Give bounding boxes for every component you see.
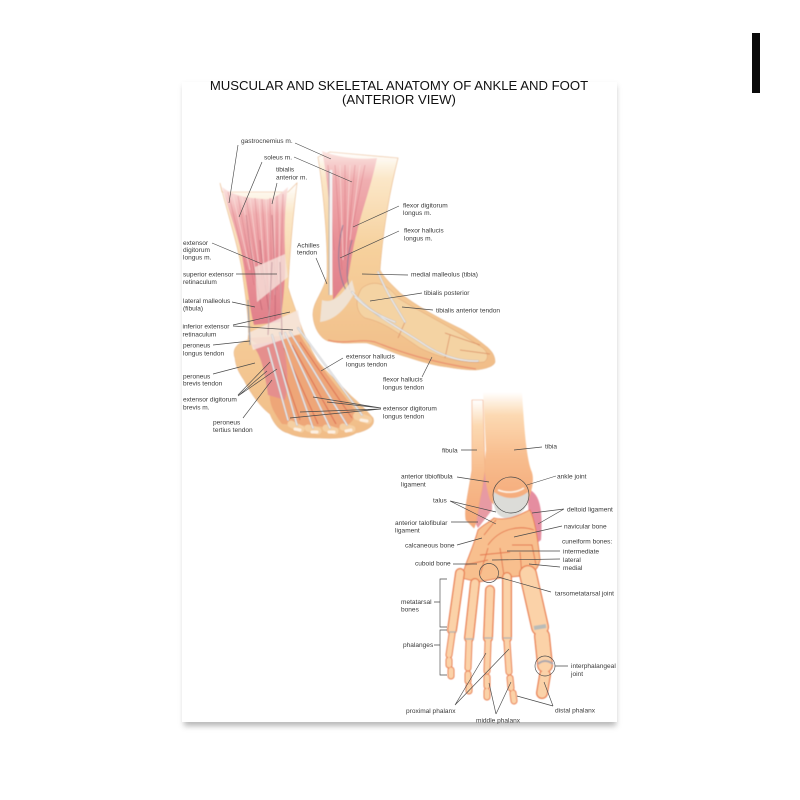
labels: side view: longus m.: [403, 210, 432, 217]
labels: front view: peroneus: [183, 342, 211, 350]
labels: side view: tibialis anterior tendon: [436, 308, 500, 314]
tibia: [483, 392, 533, 509]
labels: front view: peroneus: [213, 420, 241, 426]
ligaments: [468, 468, 492, 528]
labels: front view: [182, 138, 307, 434]
labels: front view: retinaculum: [182, 332, 217, 338]
labels: front view: superior extensor: [183, 272, 234, 278]
illustration: side view foot muscles: [313, 151, 495, 370]
labels: skeleton: talus: [433, 498, 448, 504]
labels: side view: extensor hallucis: [346, 354, 395, 360]
labels: front view: gastrocnemius m.: [241, 138, 293, 145]
labels: side view: Achilles: [297, 242, 320, 250]
talus: [493, 492, 528, 518]
heel fascia: [320, 280, 355, 322]
labels: side view: medial malleolus (tibia): [411, 272, 478, 278]
labels: skeleton: anterior tibiofibula: [401, 474, 453, 480]
labels: side view: longus tendon: [383, 384, 424, 392]
labels: front view: extensor digitorum: [183, 396, 237, 404]
metatarsals and phalanges outline: [449, 573, 545, 701]
labels: skeleton: interphalangeal: [571, 663, 616, 670]
poster shadow: [184, 86, 616, 726]
labels: side view: extensor digitorum: [383, 406, 437, 412]
labels: side view: flexor digitorum: [403, 202, 448, 210]
labels: side view: longus tendon: [383, 414, 424, 420]
labels: skeleton: fibula: [442, 448, 458, 454]
labels: front view: inferior extensor: [182, 324, 230, 330]
labels: front view: peroneus: [183, 374, 211, 380]
labels: skeleton: proximal phalanx: [406, 708, 456, 715]
labels: skeleton: medial: [563, 565, 583, 572]
labels: side view: [297, 202, 500, 420]
labels: skeleton: ligament: [401, 482, 426, 488]
poster sheet: [182, 82, 617, 722]
labels: skeleton: ankle joint: [557, 474, 587, 480]
labels: front view: longus tendon: [183, 350, 224, 358]
toes: [291, 424, 352, 431]
tarsal bones: [462, 510, 540, 582]
labels: skeleton: ligament: [395, 528, 420, 534]
labels: front view: brevis m.: [183, 404, 210, 412]
labels: skeleton: calcaneous bone: [405, 542, 455, 550]
title: (ANTERIOR VIEW): [342, 92, 456, 107]
labels: skeleton: lateral: [563, 557, 581, 564]
labels: skeleton: navicular bone: [564, 524, 607, 530]
labels: side view: flexor hallucis: [383, 376, 423, 384]
labels: skeleton: deltoid ligament: [567, 506, 613, 514]
fibula: [465, 400, 485, 528]
labels: front view: tertius tendon: [213, 427, 253, 434]
labels: front view: tibialis: [276, 166, 295, 174]
illustration: foot skeleton: [449, 392, 553, 701]
labels: front view: (fibula): [183, 306, 203, 312]
labels: skeleton: tarsometatarsal joint: [555, 590, 614, 598]
labels: front view: longus m.: [183, 254, 212, 262]
labels: side view: flexor hallucis: [404, 228, 444, 234]
labels: skeleton: joint: [570, 671, 583, 678]
labels: skeleton: tibia: [545, 444, 557, 450]
labels: front view: anterior m.: [276, 174, 307, 182]
labels: skeleton: metatarsal: [401, 599, 432, 606]
labels: front view: digitorum: [183, 247, 210, 254]
labels: skeleton: [395, 444, 616, 724]
labels: skeleton: phalanges: [403, 642, 434, 649]
labels: skeleton: cuneiform bones:: [562, 538, 612, 546]
labels: front view: retinaculum: [183, 279, 217, 286]
labels: side view: longus m.: [404, 236, 433, 242]
labels: front view: brevis tendon: [183, 380, 223, 388]
title: MUSCULAR AND SKELETAL ANATOMY OF ANKLE AND FOOT: [210, 78, 588, 93]
foot bones: [357, 283, 487, 362]
labels: side view: longus tendon: [346, 362, 387, 368]
leader lines: [212, 143, 568, 714]
illustration: front view foot muscles: [220, 183, 374, 438]
labels: front view: lateral malleolus: [183, 298, 231, 305]
labels: skeleton: distal phalanx: [555, 708, 596, 714]
labels: skeleton: middle phalanx: [476, 718, 521, 724]
black bar: [752, 33, 760, 93]
labels: front view: soleus m.: [264, 154, 292, 162]
labels: front view: extensor: [183, 240, 209, 247]
labels: skeleton: bones: [401, 606, 420, 614]
labels: skeleton: intermediate: [563, 548, 599, 556]
title: [210, 78, 588, 107]
retinacula: [255, 254, 288, 302]
tendons: [268, 328, 362, 428]
labels: side view: tendon: [297, 250, 317, 256]
labels: skeleton: cuboid bone: [415, 560, 451, 568]
labels: side view: tibialis posterior: [424, 290, 470, 297]
labels: skeleton: anterior talofibular: [395, 520, 448, 527]
